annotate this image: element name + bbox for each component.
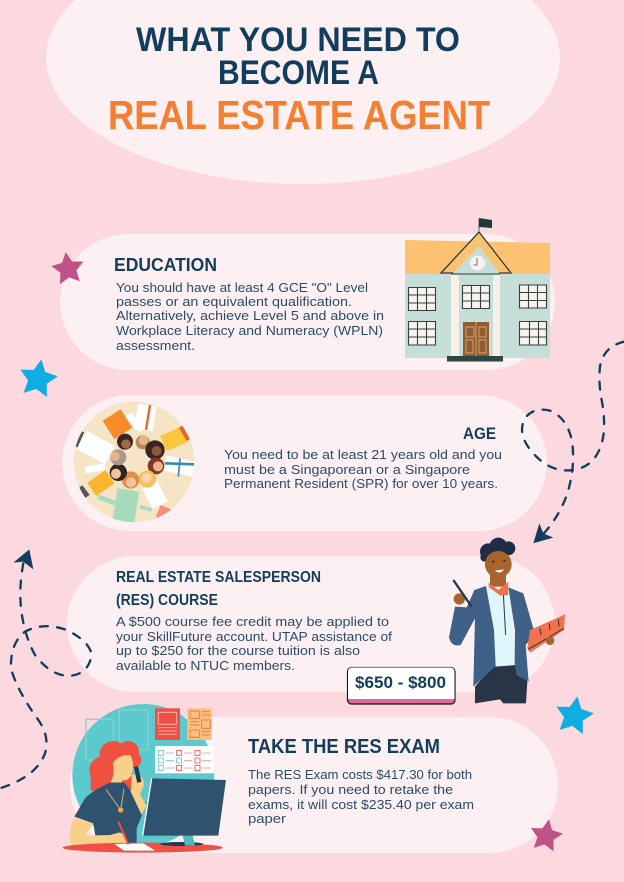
arrow: dashed loop on left — [0, 549, 92, 788]
heading: age: AGE — [463, 424, 496, 443]
icon: woman on phone at computer — [63, 704, 226, 853]
text: age body: You need to be at least 21 years old and you — [224, 447, 502, 462]
decorative star: blue left — [16, 356, 60, 398]
heading: RES course: (RES) COURSE — [116, 592, 218, 609]
panel: education — [60, 218, 555, 370]
decorative star: plum bottom right — [528, 816, 565, 852]
text: education body: Workplace Literacy and Numeracy (WPLN) — [116, 323, 383, 338]
decorative star: blue right — [552, 693, 596, 735]
panel: RES course — [67, 538, 565, 704]
text: education body: Alternatively, achieve Level 5 and above in — [116, 308, 384, 323]
icon: man with book — [449, 538, 565, 703]
title line 2: BECOME A — [218, 54, 379, 92]
text: education body — [116, 280, 384, 353]
text: exam body: paper — [248, 811, 287, 826]
text: course body — [116, 614, 392, 673]
icon: circle of people — [74, 402, 194, 522]
text: exam body: exams, it will cost $235.40 per exam — [248, 797, 474, 812]
heading: take the RES exam: TAKE THE RES EXAM — [248, 735, 440, 758]
title line 1: WHAT YOU NEED TO — [136, 21, 460, 59]
text: course body: up to $250 for the course tuition is also — [116, 643, 360, 658]
text: age body: Permanent Resident (SPR) for over 10 years. — [224, 476, 498, 491]
arrow: dashed loop on right — [522, 342, 624, 543]
panel: RES exam — [63, 704, 558, 853]
price text: $650 - $800 — [355, 673, 446, 692]
text: age body: must be a Singaporean or a Singapore — [224, 462, 470, 477]
text: exam body: The RES Exam costs $417.30 for both — [248, 767, 472, 782]
heading: education: EDUCATION — [114, 255, 217, 275]
icon: school building — [405, 218, 550, 362]
text: age body — [224, 447, 502, 491]
heading: RES course — [116, 569, 321, 609]
text: education body: You should have at least 4 GCE "O" Level — [116, 280, 368, 295]
text: course body: A $500 course fee credit may be applied to — [116, 614, 389, 629]
text: exam body — [248, 767, 474, 826]
decorative star: plum top left — [50, 250, 86, 285]
text: education body: assessment. — [116, 338, 195, 353]
header: title ellipse and title — [46, 0, 560, 184]
text: course body: your SkillFuture account. UTAP assistance of — [116, 629, 392, 644]
text: education body: passes or an equivalent qualification. — [116, 294, 352, 309]
panel: age — [62, 395, 547, 531]
title line 3: REAL ESTATE AGENT — [108, 92, 490, 138]
heading: RES course: REAL ESTATE SALESPERSON — [116, 569, 321, 586]
price badge — [348, 668, 455, 704]
text: course body: available to NTUC members. — [116, 658, 295, 673]
text: exam body: papers. If you need to retake the — [248, 782, 453, 797]
